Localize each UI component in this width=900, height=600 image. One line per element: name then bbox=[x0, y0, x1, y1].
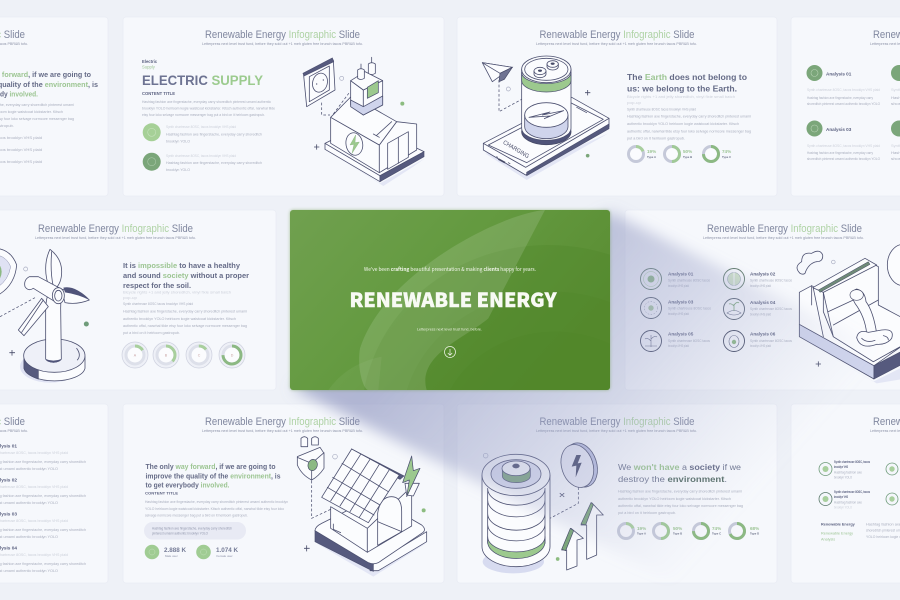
long diagonal shadow bbox=[292, 212, 900, 600]
analysis 06 bbox=[724, 330, 792, 352]
heading: destroy the environment . bbox=[618, 474, 727, 484]
label: electric supply small: Electric bbox=[142, 59, 158, 64]
heading bbox=[627, 72, 747, 94]
body text bbox=[0, 103, 74, 164]
icon item four bbox=[886, 493, 898, 505]
body text: Synth chartreuse 8OSC tacos brooklyn VHS plaid bbox=[123, 302, 193, 306]
analysis 06: brooklyn VHS plaid bbox=[750, 344, 771, 348]
analysis 01 bbox=[640, 268, 710, 290]
heading: We won't have a society if we bbox=[618, 462, 741, 472]
analysis 01: shoreditch pinterest umami authentic brooklyn YOLO bbox=[807, 102, 880, 106]
icon item one: brooklyn VHS bbox=[834, 465, 849, 469]
slide title: Renewable Energy Infographic Slide bbox=[540, 416, 695, 428]
slide subtitle: Letterpress next level trust fund, before they sold out +1 meh gluten free brunch tacos PBR&B tofu. bbox=[202, 429, 363, 433]
plug box bbox=[351, 81, 363, 115]
heading bbox=[0, 72, 98, 98]
icon item three bbox=[886, 463, 898, 475]
slide title: Renewable Energy Infographic Slide bbox=[540, 29, 695, 41]
panel: top left cropped slide bbox=[0, 17, 108, 196]
footer labels bbox=[821, 522, 856, 542]
analysis 03: brooklyn VHS plaid bbox=[668, 312, 689, 316]
footer text bbox=[866, 522, 900, 539]
slide subtitle: Letterpress next level trust fund, before they sold out +1 meh gluten free brunch tacos PBR&B tofu. bbox=[202, 42, 363, 46]
icon: green circle one bbox=[143, 123, 161, 141]
icon item one: Synth chartreuse 8OSC, tacos bbox=[834, 460, 870, 464]
illustration: battery on phone bbox=[482, 56, 609, 180]
icon item one bbox=[819, 460, 870, 480]
text block one: Synth chartreuse 8OSC, tacos brooklyn VHS plaid bbox=[166, 125, 236, 129]
analysis 01: Analysis 01 bbox=[826, 72, 852, 76]
icon item two: brooklyn VHS bbox=[834, 495, 849, 499]
analysis 05 bbox=[640, 330, 710, 352]
slide subtitle: Letterpress next level trust fund, before they sold out +1 meh gluten free brunch tacos PBR&B tofu. bbox=[703, 236, 864, 240]
analysis 03 bbox=[640, 298, 711, 318]
donut chart: 74 percent: 74% bbox=[712, 526, 721, 531]
donut chart B bbox=[153, 342, 179, 368]
body text: Hashtag fashion axe fingerstache, everyday carry shoreditch pinterest umami authentic bbox=[142, 100, 271, 104]
stat one: 2.888 K bbox=[164, 547, 187, 554]
callout pill bbox=[144, 522, 246, 540]
panel: analysis dam slide bbox=[625, 210, 900, 390]
analysis 03: shoreditch pinterest umami authentic brooklyn YOLO bbox=[807, 157, 880, 161]
illustration: house with socket and plug bbox=[303, 57, 425, 186]
body text: put a bird on it heirloom gastropub. bbox=[627, 136, 685, 140]
body text: put a bird on it heirloom gastropub. bbox=[618, 511, 676, 515]
icon item two bbox=[819, 490, 870, 510]
body text: Bicycle rights +1 and jelly shoreditch, vinyl fixie small batch bbox=[627, 95, 735, 99]
heading: It is impossible to have a healthy bbox=[123, 261, 241, 270]
body text: Hashtag fashion axe fingerstache, everyday carry shoreditch pinterest umami authentic brooklyn bbox=[145, 500, 288, 504]
slide subtitle: Letterpress next level trust fund, before they sold out +1 meh gluten free brunch tacos PBR&B tofu. bbox=[536, 429, 697, 433]
donut chart: 74 percent bbox=[694, 524, 721, 538]
callout pill: pinterest umami authentic brooklyn YOLO bbox=[152, 532, 208, 536]
heading: improve the quality of the environment, is bbox=[146, 474, 281, 480]
body text: Hashtag fashion axe fingerstache, everyday carry shoreditch pinterest umami bbox=[123, 310, 247, 314]
footer labels: Renewable Energy bbox=[821, 532, 853, 536]
icon item one: Hashtag fashion axe bbox=[834, 470, 862, 474]
body text: brooklyn YOLO heirloom kogie waistcoat kickstarter. Kitsch authentic offal, narwhal tilde bbox=[142, 106, 275, 110]
panel: top right cropped slide bbox=[791, 17, 900, 196]
heading: us: we belong to the Earth. bbox=[627, 84, 737, 94]
analysis 02: brooklyn VHS plaid bbox=[750, 284, 771, 288]
icon item one: brooklyn YOLO bbox=[834, 476, 852, 480]
analysis 05: Synth chartreuse 8OSC tacos bbox=[668, 339, 710, 343]
donut chart: 50 percent: 50% bbox=[683, 149, 692, 154]
donut chart: 19 percent bbox=[618, 524, 646, 538]
small caption: Letterpress next level trust fund, before. bbox=[417, 328, 482, 332]
analysis list bbox=[0, 444, 86, 573]
heading bbox=[618, 462, 741, 484]
analysis 05: brooklyn VHS plaid bbox=[668, 344, 689, 348]
stat two bbox=[196, 545, 239, 559]
body text: selvage normcore messenger bag put a bird on it heirloom gastropub. bbox=[145, 514, 248, 518]
donut chart C bbox=[186, 342, 212, 368]
body text bbox=[123, 290, 247, 335]
slide subtitle: Letterpress next level trust fund, before they sold out +1 meh gluten free brunch tacos PBR&B tofu. bbox=[35, 236, 196, 240]
body text: put a bird on it heirloom gastropub. bbox=[123, 331, 180, 335]
analysis 03: Hashtag fashion axe fingerstache, everyday carry bbox=[807, 151, 873, 155]
donut chart: 74 percent: Type C bbox=[722, 155, 731, 159]
label: electric supply small bbox=[142, 59, 158, 70]
analysis 03: Analysis 03 bbox=[668, 300, 694, 304]
donut chart: 68 percent bbox=[730, 524, 759, 538]
donut chart D: D bbox=[231, 354, 234, 358]
body text: Synth chartreuse 8OSC tacos brooklyn VHS plaid bbox=[627, 108, 696, 112]
text block two: brooklyn YOLO bbox=[166, 168, 190, 172]
donut chart: 74 percent bbox=[704, 146, 731, 162]
body text: pop-up bbox=[627, 101, 641, 105]
arrow small bbox=[562, 528, 583, 570]
panel: bottom right cropped slide bbox=[791, 404, 900, 583]
analysis 03: Analysis 03 bbox=[826, 127, 852, 132]
body text: authentic brooklyn YOLO heirloom kogie waistcoat kickstarter. Kitsch bbox=[618, 497, 731, 501]
icon: down arrow circle bbox=[444, 346, 456, 358]
tagline: We've been crafting beautiful presentation & making clients happy for years. bbox=[364, 266, 537, 273]
heading bbox=[146, 464, 281, 490]
donut chart B: B bbox=[165, 354, 168, 358]
illustration: dam with water pipe bbox=[797, 244, 900, 383]
content title: CONTENT TITLE bbox=[145, 490, 178, 496]
text block one: brooklyn YOLO bbox=[166, 140, 190, 144]
body text bbox=[618, 490, 743, 515]
analysis 01: Synth chartreuse 8OSC, tacos brooklyn VHS plaid bbox=[807, 88, 880, 92]
analysis 03: Synth chartreuse 8OSC, tacos brooklyn VHS plaid bbox=[807, 144, 880, 148]
slide title: Renewable Energy Infographic Slide bbox=[205, 29, 360, 41]
donut chart: 68 percent: 68% bbox=[750, 526, 759, 531]
slide title: Renewable Energy Infographic Slide bbox=[38, 223, 193, 235]
icon: green circle two bbox=[143, 153, 161, 171]
analysis 01: Hashtag fashion axe fingerstache, everyday carry bbox=[807, 96, 873, 100]
body text: Hashtag fashion axe fingerstache, everyday carry shoreditch pinterest umami bbox=[627, 114, 751, 118]
callout pill: Hashtag fashion axe fingerstache, everyday carry shoreditch bbox=[152, 526, 232, 530]
heading: electric supply: ELECTRIC SUPPLY bbox=[142, 73, 263, 88]
donut chart A bbox=[122, 342, 148, 368]
donut chart: 19 percent: Type A bbox=[637, 532, 646, 536]
analysis 04 bbox=[724, 298, 792, 320]
donut chart: 74 percent: 74% bbox=[722, 149, 731, 154]
illustration: big battery with arrows bbox=[482, 439, 603, 573]
analysis 04: Synth chartreuse 8OSC tacos bbox=[750, 307, 792, 311]
icon item two: Hashtag fashion axe bbox=[834, 500, 862, 504]
analysis 01 bbox=[806, 65, 880, 106]
icon item two: Synth chartreuse 8OSC, tacos bbox=[834, 490, 870, 494]
donut chart: 50 percent bbox=[654, 524, 682, 538]
puddle bbox=[857, 330, 892, 346]
stat two: Female user bbox=[216, 554, 233, 558]
coin with bolt bbox=[559, 439, 603, 491]
donut chart: 68 percent: Type D bbox=[750, 532, 759, 536]
analysis 02 and 04 icons bbox=[891, 65, 900, 161]
slide title: Renewable Energy Infographic Slide bbox=[205, 416, 360, 428]
illustration: battery on phone: CHARGING bbox=[502, 140, 530, 160]
analysis 03: Synth chartreuse 8OSC tacos bbox=[668, 306, 711, 310]
text block two: Hashtag fashion axe fingerstache, everyday carry shoreditch bbox=[166, 161, 262, 165]
heading: The Earth does not belong to bbox=[627, 72, 747, 82]
text block two bbox=[166, 154, 262, 172]
heading: to get everybody involved. bbox=[146, 482, 230, 490]
body text: authentic offal, narwhal tilde etsy four loko selvage normcore messenger bag bbox=[618, 504, 743, 508]
donut chart: 19 percent: Type A bbox=[647, 155, 656, 159]
analysis 02: Analysis 02 bbox=[750, 272, 776, 276]
donut chart D bbox=[219, 342, 245, 368]
icon item two: brooklyn YOLO bbox=[834, 506, 852, 510]
footer labels: Renewable Energy bbox=[821, 522, 856, 526]
analysis 05: Analysis 05 bbox=[668, 332, 694, 336]
heading: and sound society without a proper bbox=[123, 271, 249, 280]
body text: authentic brooklyn YOLO heirloom kogie waistcoat kickstarter. Kitsch bbox=[627, 122, 739, 126]
body text bbox=[145, 500, 288, 518]
analysis 04: Analysis 04 bbox=[750, 300, 776, 305]
donut chart C: C bbox=[198, 354, 201, 358]
donut chart: 19 percent: 19% bbox=[647, 149, 656, 154]
stat one bbox=[145, 545, 187, 559]
body text: etsy four loko selvage normcore messenger bag put a bird on it heirloom gastropub. bbox=[142, 113, 265, 117]
panel: wind turbine slide bbox=[0, 210, 276, 390]
analysis 06: Analysis 06 bbox=[750, 332, 776, 336]
plug bbox=[301, 437, 308, 447]
body text: Hashtag fashion axe fingerstache, everyday carry shoreditch pinterest umami bbox=[618, 490, 742, 494]
body text: authentic offal, narwhal tilde etsy four loko selvage normcore messenger bag bbox=[123, 324, 247, 328]
donut chart: 19 percent: 19% bbox=[637, 526, 646, 531]
arrow large bbox=[581, 503, 603, 559]
blades bbox=[46, 249, 62, 289]
panel: bottom left cropped slide bbox=[0, 404, 108, 583]
illustration: wind turbine bbox=[0, 248, 89, 383]
heading bbox=[123, 261, 249, 290]
slide subtitle: Letterpress next level trust fund, before they sold out +1 meh gluten free brunch tacos PBR&B tofu. bbox=[536, 42, 697, 46]
donut chart: 50 percent: Type B bbox=[683, 155, 692, 159]
paper plane bbox=[482, 63, 512, 82]
leaf coin cut off at edge bbox=[0, 248, 17, 295]
stat two: 1.074 K bbox=[216, 547, 239, 554]
analysis 02: Synth chartreuse 8OSC tacos bbox=[750, 278, 792, 282]
slide title: Renewable Energy Infographic Slide bbox=[707, 223, 862, 235]
analysis 01: Analysis 01 bbox=[668, 272, 694, 276]
donut chart A: A bbox=[134, 354, 137, 358]
hub bbox=[25, 277, 63, 302]
illustration: solar roof house bbox=[297, 437, 427, 577]
cloud bbox=[797, 251, 823, 274]
content title: CONTENT TITLE bbox=[142, 91, 175, 96]
panel: central green cover bbox=[288, 208, 612, 392]
pipe bbox=[852, 289, 877, 338]
heading: The only way forward, if we are going to bbox=[146, 464, 276, 471]
donut chart: 74 percent: Type C bbox=[712, 532, 721, 536]
donut chart: 50 percent: 50% bbox=[673, 526, 682, 531]
analysis 06: Synth chartreuse 8OSC tacos bbox=[750, 339, 792, 343]
walls bbox=[331, 507, 367, 552]
stat one: Male user bbox=[165, 554, 178, 558]
donut chart: 50 percent: Type B bbox=[673, 532, 682, 536]
analysis 03 bbox=[806, 120, 880, 161]
body text: Bicycle rights +1 and jelly shoreditch, vinyl fixie small batch bbox=[123, 290, 231, 294]
main title: RENEWABLE ENERGY bbox=[350, 284, 558, 313]
analysis 01: brooklyn VHS plaid bbox=[668, 284, 689, 288]
coin cut off at right bbox=[887, 244, 900, 286]
donut chart: 50 percent bbox=[664, 146, 692, 162]
body text: pop-up bbox=[123, 296, 137, 300]
analysis 01: Synth chartreuse 8OSC tacos bbox=[668, 278, 710, 282]
body text: YOLO heirloom kogie waistcoat kickstarter. Kitsch authentic offal, narwhal tilde etsy four loko bbox=[145, 507, 284, 511]
panel: electric supply slide bbox=[123, 17, 444, 196]
panel: earth battery slide bbox=[457, 17, 777, 196]
body text: authentic brooklyn YOLO heirloom kogie waistcoat kickstarter. Kitsch bbox=[123, 317, 236, 321]
text block two: Synth chartreuse 8OSC, tacos brooklyn VHS plaid bbox=[166, 154, 236, 158]
dark back edge and solar roof bbox=[352, 449, 404, 479]
battery bbox=[522, 119, 571, 145]
analysis 02 bbox=[724, 268, 792, 290]
body text bbox=[142, 100, 275, 117]
analysis 04: brooklyn VHS plaid bbox=[750, 312, 771, 316]
body text bbox=[627, 95, 751, 140]
body text: authentic offal, narwhal tilde etsy four loko selvage normcore messenger bag bbox=[627, 130, 751, 134]
heading: respect for the soil. bbox=[123, 281, 191, 290]
socket bbox=[304, 60, 335, 107]
panel: solar house slide bbox=[123, 404, 444, 583]
label: electric supply small: Supply bbox=[142, 64, 156, 70]
text block one: Hashtag fashion axe fingerstache, everyday carry shoreditch bbox=[166, 132, 262, 136]
footer labels: Analysis bbox=[821, 538, 835, 542]
panel: battery society slide bbox=[457, 404, 777, 583]
donut chart: 19 percent bbox=[628, 146, 656, 162]
text block one bbox=[166, 125, 262, 144]
